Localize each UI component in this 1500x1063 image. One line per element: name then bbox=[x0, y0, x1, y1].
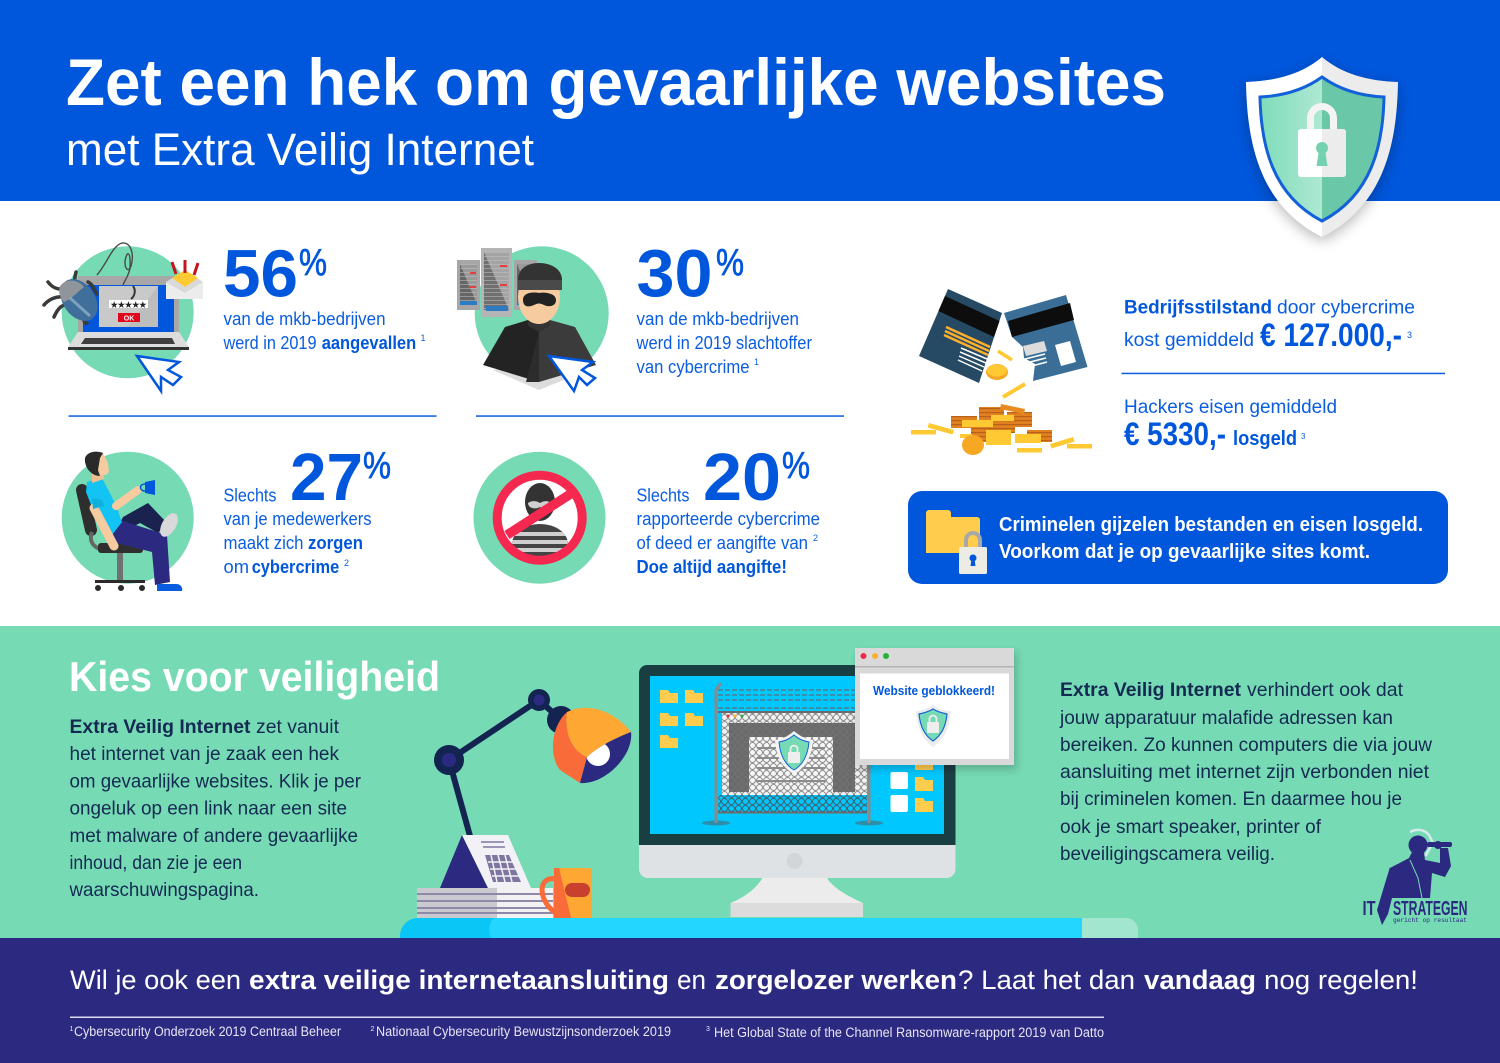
stat: business downtime cost: kost gemiddeld bbox=[1124, 329, 1254, 351]
icon: security shield with padlock bbox=[1246, 57, 1398, 241]
icon: laptop with phishing hook, bug and envelope: OK bbox=[124, 316, 134, 322]
text: 20% caption: rapporteerde cybercrime bbox=[636, 508, 820, 529]
panel: footer bbox=[0, 938, 1500, 1063]
call to action: nog regelen! bbox=[1264, 965, 1418, 995]
text: 56% caption: van de mkb-bedrijven bbox=[224, 308, 386, 329]
icon: laptop with phishing hook, bug and envelope bbox=[44, 243, 203, 391]
icon: fence with barbed wire and blocked site bbox=[702, 683, 883, 826]
icon: papers and calculator bbox=[417, 835, 553, 918]
callout: ransomware warning bbox=[908, 491, 1448, 584]
text: 56% caption: werd in 2019 bbox=[223, 332, 316, 353]
icon: prohibited burglar bbox=[474, 452, 606, 584]
icon: torn credit card with falling coins bbox=[911, 289, 1092, 455]
browser message: Website geblokkeerd! bbox=[873, 684, 995, 698]
stat: 20%: Slechts bbox=[636, 485, 690, 506]
text: 56% caption bbox=[223, 308, 426, 353]
stat: 30%: 30 bbox=[636, 236, 712, 312]
text block: right paragraph: ook je smart speaker, printer of bbox=[1060, 816, 1322, 838]
text block: right paragraph: beveiligingscamera veilig. bbox=[1060, 843, 1275, 865]
footnote 1: Cybersecurity Onderzoek 2019 Centraal Beheer bbox=[74, 1024, 341, 1039]
text block: left paragraph: waarschuwingspagina. bbox=[69, 879, 259, 901]
logo: IT Strategen: gericht op resultaat bbox=[1393, 917, 1467, 924]
text block: left paragraph: het internet van je zaak een hek bbox=[70, 743, 339, 765]
call to action bbox=[70, 965, 1418, 995]
title: Zet een hek om gevaarlijke websites bbox=[66, 45, 1166, 119]
call to action: en bbox=[677, 965, 706, 995]
text: 30% caption: 1 bbox=[754, 357, 759, 367]
footnote 3: 3 bbox=[706, 1026, 710, 1033]
logo: IT Strategen: IT bbox=[1362, 898, 1376, 920]
stat: 20% bbox=[636, 440, 810, 515]
subtitle: met Extra Veilig Internet bbox=[66, 124, 534, 175]
stat: average ransom: losgeld bbox=[1233, 428, 1297, 450]
stat: 27%: 27 bbox=[290, 440, 363, 515]
text: 20% caption: of deed er aangifte van bbox=[636, 532, 808, 553]
footnote 1: 1 bbox=[70, 1026, 74, 1033]
stat: 20%: % bbox=[782, 445, 810, 487]
text: 20% caption bbox=[636, 508, 820, 577]
icon: computer monitor bbox=[639, 665, 956, 917]
callout text: Voorkom dat je op gevaarlijke sites komt. bbox=[999, 541, 1370, 563]
icon: coffee mug bbox=[542, 868, 592, 918]
call to action: zorgelozer werken bbox=[715, 965, 957, 995]
text block: left paragraph: Extra Veilig Internet bbox=[70, 716, 251, 738]
call to action: extra veilige internetaansluiting bbox=[249, 965, 669, 995]
text: 27% caption: cybercrime bbox=[252, 556, 339, 577]
text block: right paragraph: Extra Veilig Internet bbox=[1060, 679, 1242, 701]
text: 27% caption: om bbox=[224, 556, 249, 577]
text block: left paragraph: met malware of andere gevaarlijke bbox=[70, 825, 358, 847]
text: 27% caption: van je medewerkers bbox=[224, 508, 372, 529]
text block: right paragraph: jouw apparatuur malafide adressen kan bbox=[1059, 707, 1393, 729]
logo: IT Strategen bbox=[1362, 830, 1468, 925]
text: 30% caption bbox=[636, 308, 812, 377]
icon: locked folder bbox=[926, 510, 987, 574]
stat: 27% bbox=[224, 440, 391, 515]
stat: 27%: Slechts bbox=[224, 485, 276, 506]
text: 27% caption: maakt zich bbox=[224, 532, 304, 553]
text: 27% caption bbox=[224, 508, 372, 577]
folders on screen bbox=[660, 690, 933, 812]
panel: 56 percent attacked bbox=[44, 236, 426, 391]
text block: left paragraph: inhoud, dan zie je een bbox=[70, 852, 242, 874]
icon: desk surface bbox=[400, 918, 1138, 938]
browser window: website blocked bbox=[855, 648, 1017, 770]
panel: kies voor veiligheid bbox=[0, 626, 1500, 938]
text block: left paragraph: ongeluk op een link naar een site bbox=[70, 798, 347, 820]
stat: 56%: 56 bbox=[223, 236, 298, 312]
stat: 56%: % bbox=[299, 242, 327, 284]
panel: 20 percent reported bbox=[474, 440, 820, 584]
stat: 20%: 20 bbox=[703, 440, 781, 515]
stat: business downtime cost: € 127.000,- bbox=[1260, 317, 1402, 353]
icon: small shield in browser bbox=[916, 705, 951, 747]
text: 20% caption: 2 bbox=[813, 533, 818, 543]
stat: business downtime cost: door cybercrime bbox=[1277, 296, 1415, 318]
text: 56% caption: aangevallen bbox=[322, 332, 416, 353]
icon: laptop with phishing hook, bug and envelope: ★★★★★ bbox=[111, 300, 147, 310]
text: 27% caption: 2 bbox=[344, 558, 349, 568]
stat: 27%: % bbox=[363, 445, 391, 487]
text: 30% caption: van de mkb-bedrijven bbox=[636, 308, 799, 329]
text block: left paragraph bbox=[69, 716, 361, 901]
panel: 30 percent victim bbox=[457, 236, 812, 391]
panel: 27 percent worried bbox=[62, 440, 391, 591]
stat: average ransom: Hackers eisen gemiddeld bbox=[1124, 396, 1337, 418]
stat: business downtime cost bbox=[1124, 296, 1415, 353]
footnote 3: Het Global State of the Channel Ransomware-rapport 2019 van Datto bbox=[714, 1025, 1104, 1040]
callout text: Criminelen gijzelen bestanden en eisen losgeld. bbox=[999, 514, 1423, 536]
text: 20% caption: Doe altijd aangifte! bbox=[636, 556, 787, 577]
text block: right paragraph: bereiken. Zo kunnen computers die via jouw bbox=[1060, 734, 1433, 756]
text: 27% caption: zorgen bbox=[308, 532, 363, 553]
header band bbox=[0, 0, 1500, 201]
stat: business downtime cost: Bedrijfsstilstand bbox=[1124, 296, 1272, 318]
stat: average ransom: € 5330,- bbox=[1124, 416, 1226, 452]
text: 30% caption: van cybercrime bbox=[636, 356, 750, 377]
footnote 2: Nationaal Cybersecurity Bewustzijnsonderzoek 2019 bbox=[376, 1024, 671, 1039]
stat: 30%: % bbox=[716, 242, 744, 284]
text: 56% caption: 1 bbox=[420, 333, 426, 343]
text block: right paragraph bbox=[1059, 679, 1433, 865]
text block: right paragraph: verhindert ook dat bbox=[1247, 679, 1404, 701]
text block: right paragraph: bij criminelen komen. En daarmee hou je bbox=[1060, 788, 1402, 810]
text block: left paragraph: zet vanuit bbox=[256, 716, 340, 738]
stat: 30% bbox=[636, 236, 744, 312]
text block: right paragraph: aansluiting met internet zijn verbonden niet bbox=[1060, 761, 1430, 783]
heading: Kies voor veiligheid bbox=[69, 653, 440, 700]
icon: hacker with servers bbox=[457, 246, 609, 391]
call to action: Wil je ook een bbox=[70, 965, 241, 995]
text block: left paragraph: om gevaarlijke websites. Klik je per bbox=[70, 770, 361, 792]
icon: relaxed employee on office chair bbox=[62, 452, 194, 591]
text: 30% caption: werd in 2019 slachtoffer bbox=[636, 332, 812, 353]
call to action: ? Laat het dan bbox=[958, 965, 1135, 995]
stat: average ransom: 3 bbox=[1301, 432, 1306, 441]
icon: desk lamp bbox=[434, 689, 631, 836]
stat: business downtime cost: 3 bbox=[1407, 330, 1412, 340]
stat: average ransom bbox=[1124, 396, 1337, 452]
call to action: vandaag bbox=[1144, 965, 1256, 995]
icon: small shield on fence bbox=[775, 731, 813, 774]
footnote 2: 2 bbox=[370, 1026, 374, 1033]
callout text bbox=[999, 514, 1423, 563]
